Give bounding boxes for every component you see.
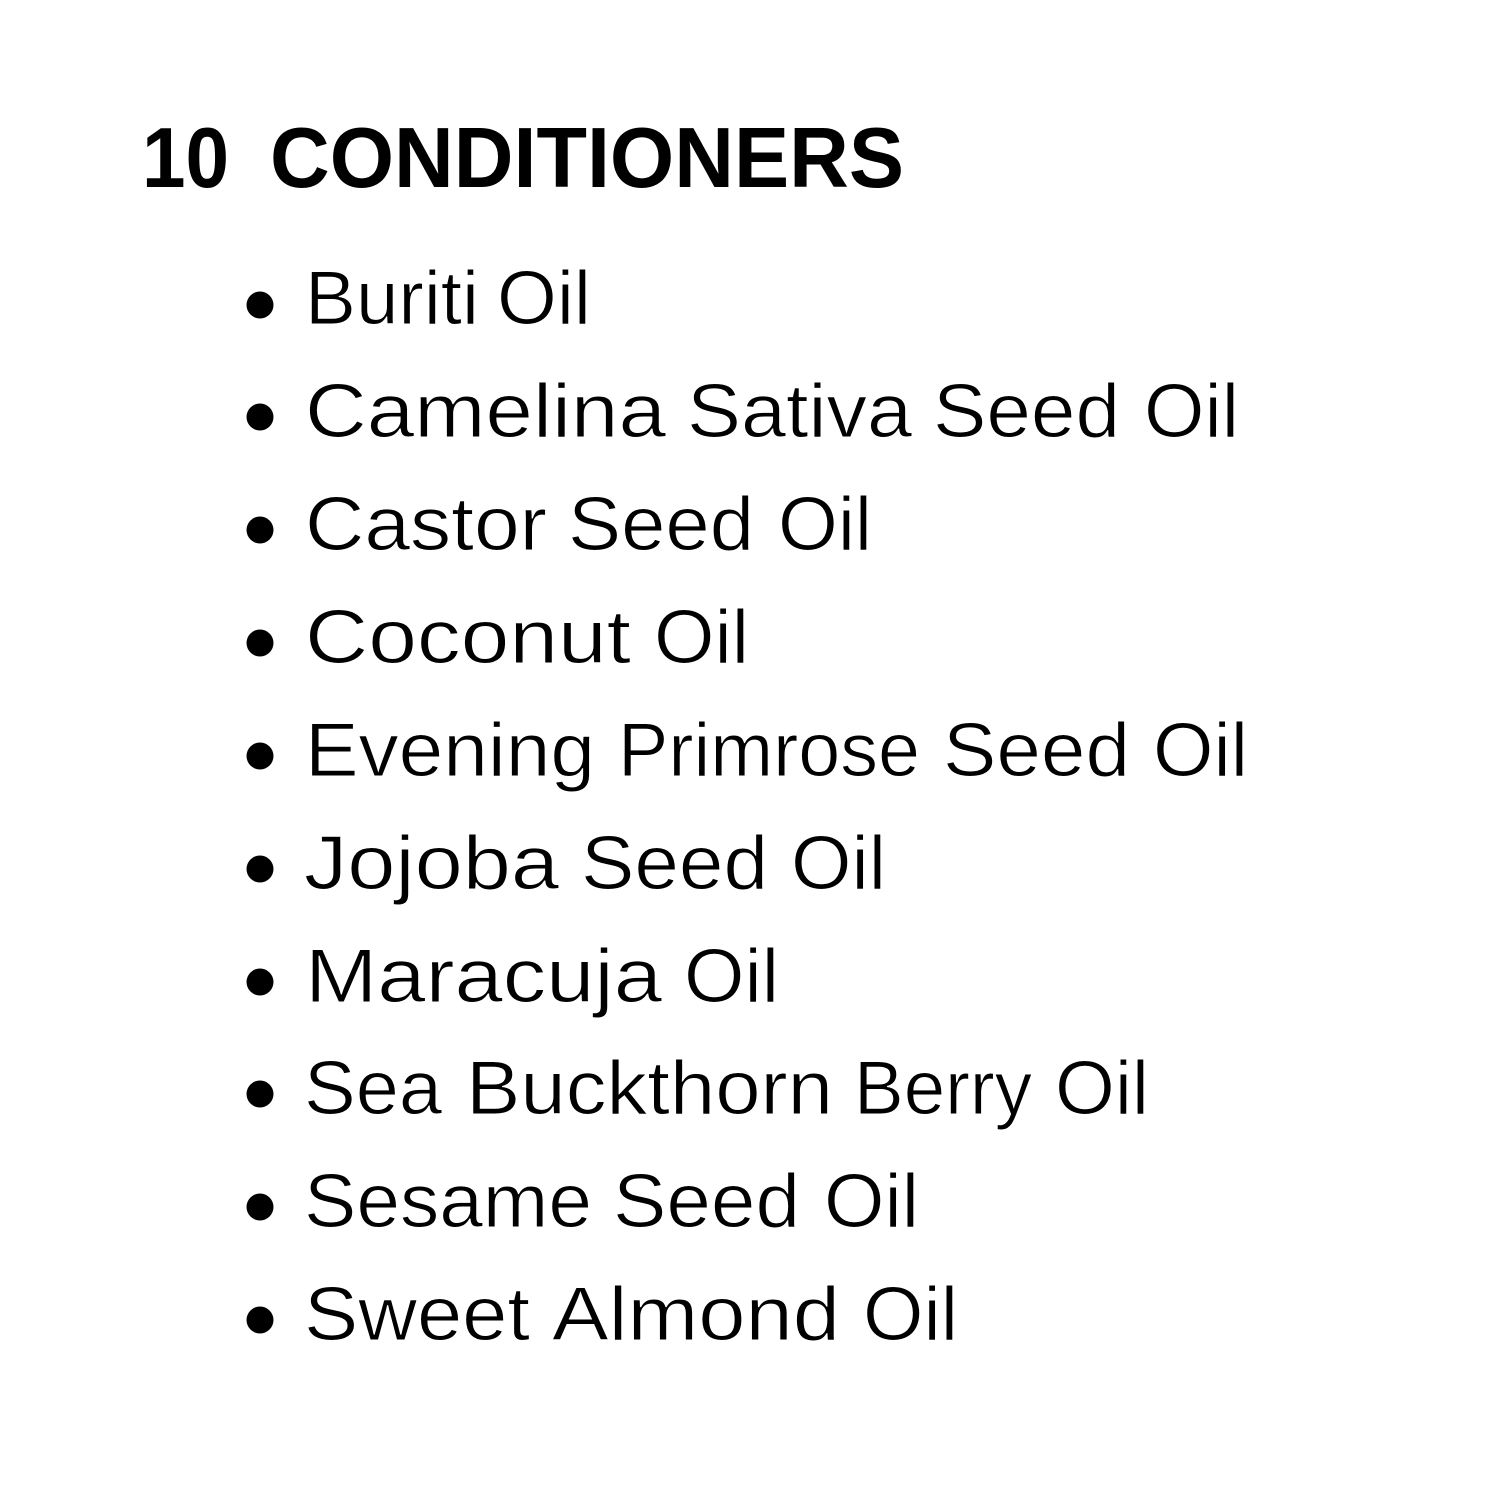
list item: Buriti Oil: Oil — [497, 256, 591, 341]
list item: Evening Primrose Seed Oil: Oil — [1153, 708, 1248, 793]
list item: Sweet Almond Oil: Almond — [552, 1272, 840, 1357]
list item: Camelina Sativa Seed Oil — [246, 369, 1239, 454]
list item: Jojoba Seed Oil: Oil — [791, 821, 886, 906]
list item: Buriti Oil — [246, 256, 591, 341]
list item: Maracuja Oil: Maracuja — [305, 934, 663, 1019]
list item: Maracuja Oil: Oil — [684, 934, 779, 1019]
list item: Buriti Oil: Buriti — [305, 256, 479, 341]
list item: Jojoba Seed Oil: Seed — [581, 821, 768, 906]
list item: Sweet Almond Oil: Oil — [863, 1272, 958, 1357]
list item: Sweet Almond Oil: Sweet — [304, 1272, 530, 1357]
list item: Sweet Almond Oil — [246, 1272, 958, 1357]
list item: Sea Buckthorn Berry Oil: Sea — [304, 1046, 443, 1131]
list item: Camelina Sativa Seed Oil: Sativa — [687, 369, 913, 454]
list item: Coconut Oil: Oil — [654, 595, 749, 680]
list item: Sesame Seed Oil: Sesame — [304, 1159, 592, 1244]
list item: Jojoba Seed Oil: Jojoba — [304, 821, 560, 906]
list item: Coconut Oil: Coconut — [305, 595, 631, 680]
list item: Jojoba Seed Oil — [246, 821, 886, 906]
list item: Castor Seed Oil: Oil — [778, 482, 872, 567]
list item: Castor Seed Oil: Seed — [568, 482, 754, 567]
list item: Sea Buckthorn Berry Oil: Buckthorn — [466, 1046, 833, 1131]
title: 10 — [142, 111, 229, 206]
list item: Evening Primrose Seed Oil: Seed — [943, 708, 1130, 793]
list item: Evening Primrose Seed Oil: Primrose — [618, 708, 920, 793]
list item: Castor Seed Oil — [246, 482, 872, 567]
list item: Sea Buckthorn Berry Oil: Oil — [1055, 1046, 1149, 1131]
list item: Sea Buckthorn Berry Oil: Berry — [854, 1046, 1032, 1131]
list item: Camelina Sativa Seed Oil: Camelina — [305, 369, 667, 454]
list item: Sesame Seed Oil: Seed — [613, 1159, 800, 1244]
ingredient list — [246, 256, 1248, 1357]
list item: Sea Buckthorn Berry Oil — [246, 1046, 1149, 1131]
list item: Evening Primrose Seed Oil — [246, 708, 1248, 793]
title: CONDITIONERS — [270, 111, 904, 206]
list item: Castor Seed Oil: Castor — [305, 482, 547, 567]
list item: Evening Primrose Seed Oil: Evening — [305, 708, 595, 793]
list item: Camelina Sativa Seed Oil: Seed — [933, 369, 1120, 454]
list item: Camelina Sativa Seed Oil: Oil — [1144, 369, 1239, 454]
list item: Sesame Seed Oil: Oil — [824, 1159, 919, 1244]
list item: Maracuja Oil — [246, 934, 779, 1019]
list item: Coconut Oil — [246, 595, 749, 680]
list item: Sesame Seed Oil — [246, 1159, 919, 1244]
